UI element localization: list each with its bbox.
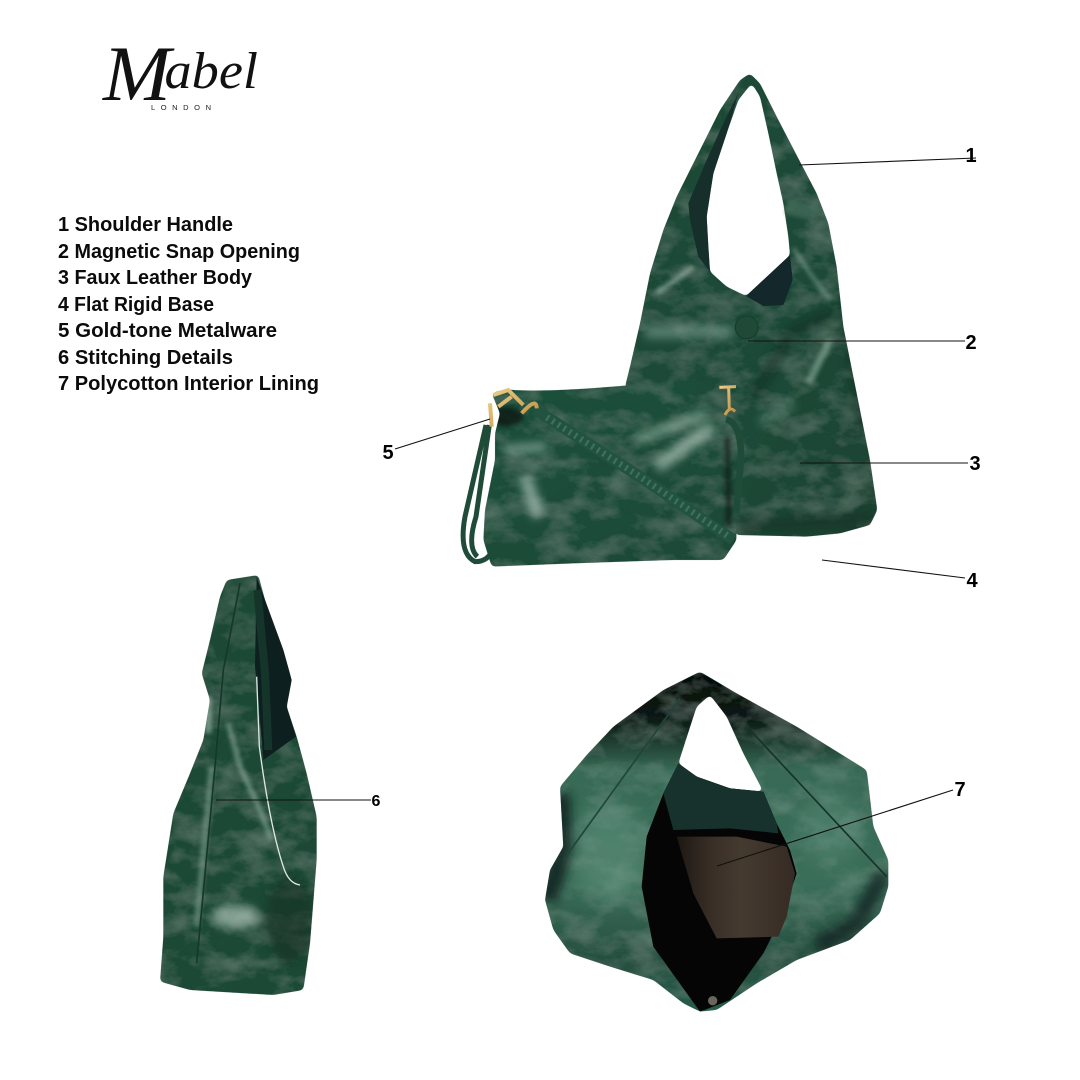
photo: top view of open bag showing lining xyxy=(545,672,888,1012)
legend item 3: 3 Faux Leather Body xyxy=(58,267,253,289)
handle inner lining left xyxy=(688,93,738,272)
number 4: 4 xyxy=(966,570,978,592)
side body xyxy=(160,575,317,995)
snap at base xyxy=(708,996,717,1005)
number 2: 2 xyxy=(965,332,977,354)
handle inner lining right xyxy=(746,255,793,306)
fold shadow xyxy=(753,313,833,397)
callout 1: shoulder handle xyxy=(799,145,977,167)
legend item 5: 5 Gold-tone Metalware xyxy=(58,320,277,342)
leader line 2 xyxy=(748,340,965,342)
leader line 7 xyxy=(717,790,953,866)
legend item 7: 7 Polycotton Interior Lining xyxy=(58,373,319,395)
left body sheen xyxy=(657,267,693,293)
base shadow xyxy=(740,520,873,527)
interior opening xyxy=(642,763,797,1012)
number 6: 6 xyxy=(372,793,381,810)
photo: front view of large green hobo bag xyxy=(625,73,877,537)
legend item 4: 4 Flat Rigid Base xyxy=(58,294,214,316)
photo: small matching crossbody pouch xyxy=(463,378,741,567)
leader line 5 xyxy=(395,419,490,449)
bag body and handle xyxy=(625,73,877,537)
lighter leather left xyxy=(573,803,647,903)
logo wordmark: abel xyxy=(165,43,258,100)
leather highlights and folds xyxy=(645,207,873,527)
logo wordmark: M xyxy=(102,30,175,117)
leader line 6 xyxy=(216,799,371,801)
seam right xyxy=(750,730,887,877)
lower sheen xyxy=(212,905,258,928)
dark interior opening xyxy=(255,577,296,760)
cross strap braid xyxy=(547,417,730,537)
leader line 4 xyxy=(822,560,965,578)
top view leather xyxy=(545,672,888,1012)
number 1: 1 xyxy=(965,145,977,167)
gold hardware right xyxy=(719,387,736,415)
cross strap xyxy=(535,409,733,540)
gold hardware left xyxy=(490,390,537,427)
brand logo: Mabel London xyxy=(102,30,258,117)
interior brown lining xyxy=(677,837,795,938)
snap band sheen xyxy=(640,320,738,343)
legend item 2: 2 Magnetic Snap Opening xyxy=(58,241,300,263)
logo tagline: LONDON xyxy=(151,103,211,112)
leader line 1 xyxy=(799,158,976,165)
strap edge highlight xyxy=(257,677,300,885)
shoulder sheen xyxy=(793,248,830,300)
interior upper teal lining xyxy=(663,763,778,833)
strap over interior xyxy=(257,590,268,750)
lower right shadow xyxy=(267,877,313,963)
magnetic snap xyxy=(735,316,758,339)
callout 5: metalware xyxy=(382,419,490,464)
legend item 1: 1 Shoulder Handle xyxy=(58,214,233,236)
lower left sheen xyxy=(525,477,538,517)
left sheen xyxy=(505,447,547,450)
body sheen right xyxy=(808,340,830,383)
photo: side view of bag xyxy=(160,575,317,995)
seam sheen xyxy=(197,767,212,927)
zip shadow corner xyxy=(490,407,523,427)
number 5: 5 xyxy=(382,442,394,464)
right strap xyxy=(726,419,741,513)
lighter leather right xyxy=(802,794,853,858)
right side shadow xyxy=(727,437,729,527)
side sheen and seams xyxy=(197,697,313,963)
number 3: 3 xyxy=(969,453,981,475)
leader line 3 xyxy=(800,462,968,464)
pouch sheen and folds xyxy=(490,407,729,527)
middle sheen xyxy=(760,403,793,423)
dark side folds xyxy=(547,790,883,947)
upper left sheen xyxy=(204,694,214,736)
central sheen xyxy=(637,413,707,440)
seam left xyxy=(563,698,680,860)
callout 4: base xyxy=(822,560,978,592)
callout 7: lining xyxy=(717,779,966,866)
number 7: 7 xyxy=(954,779,966,801)
legend: numbered list of bag features xyxy=(58,214,319,395)
crinkled sheen xyxy=(657,427,713,467)
upper handle patch xyxy=(787,207,817,213)
left dark fold xyxy=(547,793,563,900)
right dark fold xyxy=(817,873,883,947)
pouch body xyxy=(483,378,738,567)
pouch wrist strap xyxy=(463,425,493,562)
legend item 6: 6 Stitching Details xyxy=(58,347,233,369)
right edge dark sheen xyxy=(845,293,863,427)
centre sheen xyxy=(228,723,272,840)
stitched seam xyxy=(197,583,240,963)
